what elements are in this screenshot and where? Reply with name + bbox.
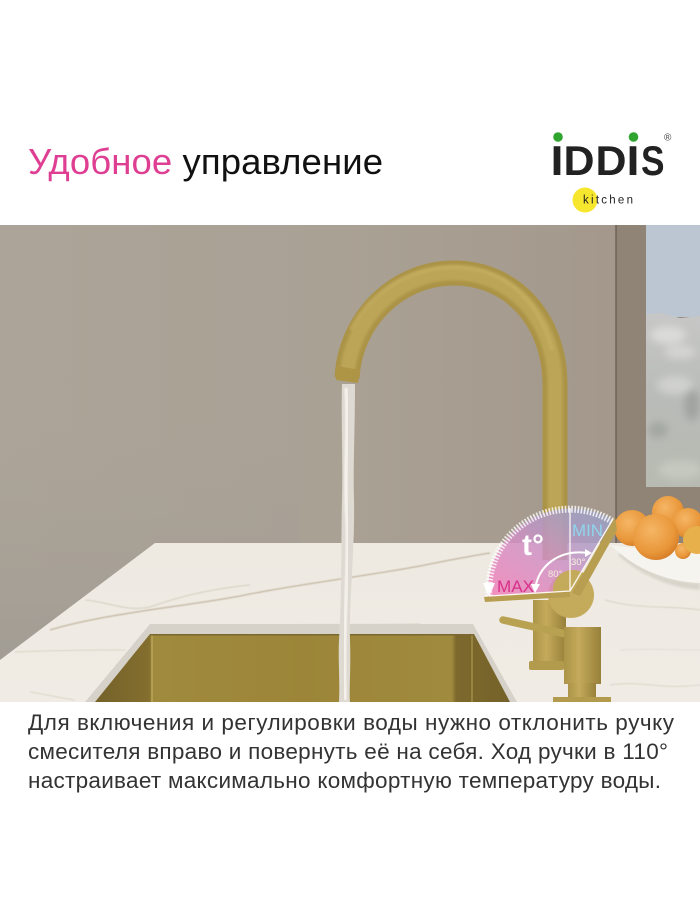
soap dispenser lever [503,620,566,634]
wall [0,225,616,702]
soap dispenser neck [568,683,596,698]
logo: IDDIS kitchen [550,132,672,212]
sink basin [95,634,510,702]
faucet foot [529,661,564,670]
30 degree label: 30° [571,557,586,568]
window frame [616,225,700,555]
MIN label: MIN [572,521,603,540]
marble veins [15,553,700,700]
logo green dot left [553,132,563,142]
spout tip [336,366,360,383]
logo letter S: S [641,137,664,184]
oranges [652,496,684,522]
MAX label: MAX [497,577,534,596]
rotation arrow head right [585,549,592,557]
dial sector [488,508,613,597]
logo letter D: D [564,137,594,184]
temperature dial [483,508,617,602]
countertop [0,543,700,702]
bowl shadow [618,552,700,590]
title: Удобное управление [28,141,383,182]
dial white edges [489,508,613,596]
mountain texture [648,326,700,479]
lower wall shading [0,632,30,660]
logo green dot right [629,132,638,142]
line 3: настраивает максимально комфортную температуру воды. [28,768,661,793]
handle bar diagonal [572,517,617,596]
logo registered mark: ® [664,132,672,144]
sink inner corner highlight left [151,634,153,702]
water highlight [345,388,347,700]
soap dispenser base [553,697,611,702]
description text [28,710,675,793]
bowl of oranges [610,496,700,590]
handle bar horizontal [484,591,570,602]
sink inner corner highlight right [471,634,473,702]
window reveal shadow [615,225,617,545]
soap dispenser body [564,627,601,684]
rotation arrow arc [535,552,588,590]
MAX marker triangle [483,583,495,597]
faucet spout [347,267,555,560]
logo yellow circle [572,188,598,212]
dial tick ring [489,509,612,596]
handle disk [548,572,594,618]
rotation arrow head left [531,584,540,593]
logo letter I: I [550,137,564,184]
80 degree label: 80° [548,569,563,580]
window mountains [646,313,700,487]
line 1: Для включения и регулировки воды нужно отклонить ручку [28,710,675,735]
disk top seen through dial [553,570,585,592]
sink top edge shadow [150,634,474,636]
sink rim [85,624,517,702]
faucet lower body [533,600,566,664]
logo letter D: D [596,137,626,184]
photo: kitchen scene [0,225,700,702]
logo kitchen label: kitchen [583,194,633,206]
logo letter I: I [626,137,640,184]
water stream [339,384,355,702]
window sky [646,225,700,317]
t degree label: t° [522,529,544,562]
bowl [610,545,700,583]
line 2: смесителя вправо и повернуть её на себя. Ход ручки в 110° [28,739,668,764]
